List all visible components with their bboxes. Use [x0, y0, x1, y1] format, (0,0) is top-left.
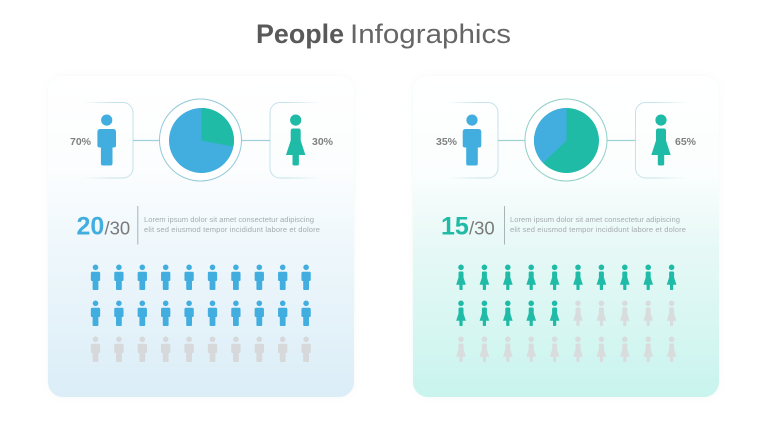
description text: Lorem ipsum dolor sit amet consectetur adipiscing	[144, 215, 314, 224]
icon: woman	[651, 114, 671, 166]
label: female percent: 65%	[675, 136, 697, 148]
divider	[137, 206, 138, 244]
score 20/30	[76, 212, 130, 240]
description text: elit sed eiusmod tempor incididunt labore et dolore	[510, 225, 686, 234]
divider	[504, 206, 505, 244]
score 15/30: /30	[469, 218, 495, 238]
male card outline	[60, 102, 133, 178]
pictogram row 3: grey women	[456, 336, 676, 362]
score 20/30: 20	[76, 212, 104, 240]
pictogram row 1: filled men	[91, 264, 311, 290]
label: male percent: 35%	[436, 136, 458, 148]
pictogram row 1: filled women	[456, 264, 676, 290]
panel background	[48, 76, 354, 397]
icon: man	[97, 114, 116, 166]
description text	[144, 215, 320, 234]
score 15/30: 15	[441, 212, 469, 240]
panel background	[413, 76, 719, 397]
title: People	[256, 19, 344, 49]
pictogram row 2: five filled, five grey women	[456, 300, 676, 326]
label: male percent: 70%	[70, 136, 92, 148]
connector lines	[133, 140, 270, 142]
description text: Lorem ipsum dolor sit amet consectetur adipiscing	[510, 215, 680, 224]
label: female percent: 30%	[312, 136, 334, 148]
pie chart: 70/30	[160, 99, 242, 181]
title: Infographics	[350, 19, 511, 49]
connector lines	[498, 140, 636, 142]
panel: male-focused statistics	[48, 76, 354, 397]
pictogram row 3: grey men	[91, 336, 311, 362]
title	[256, 19, 511, 49]
pie chart: 35/65	[525, 99, 607, 181]
description text	[510, 215, 686, 234]
score 20/30: /30	[104, 218, 130, 238]
description text: elit sed eiusmod tempor incididunt labore et dolore	[144, 225, 320, 234]
female card outline	[270, 102, 343, 178]
panel: female-focused statistics	[413, 76, 719, 397]
icon: man	[463, 114, 481, 166]
male card outline	[425, 102, 498, 178]
icon: woman	[286, 114, 305, 166]
female card outline	[636, 102, 708, 178]
score 15/30	[441, 212, 495, 240]
pictogram row 2: filled men	[91, 300, 311, 326]
